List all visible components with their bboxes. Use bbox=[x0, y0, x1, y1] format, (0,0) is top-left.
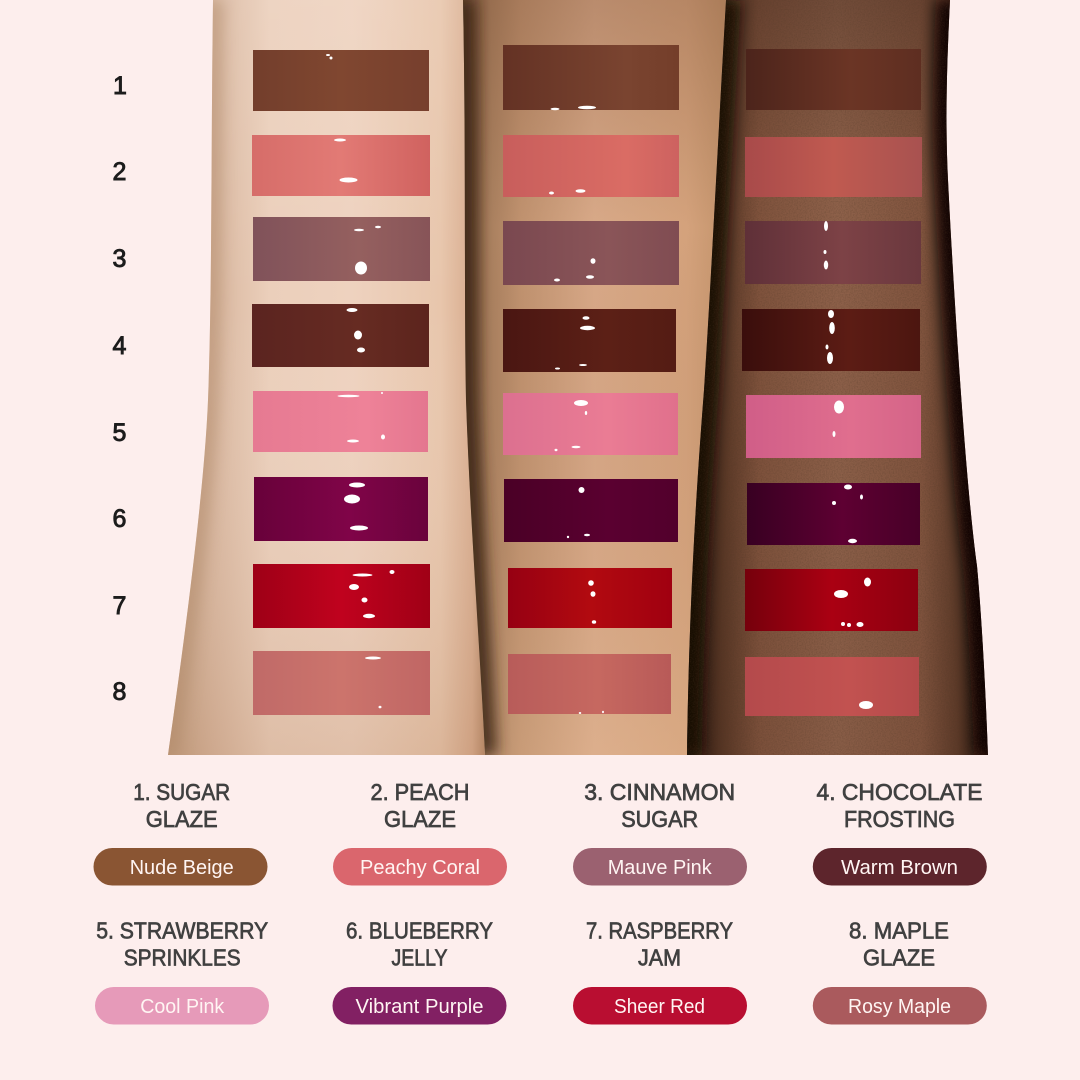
pill: Vibrant Purple bbox=[332, 987, 506, 1024]
swatch 1 deep bbox=[746, 49, 921, 110]
swatch 1 light bbox=[253, 50, 429, 111]
heading: 1. Sugar Glaze: 1. SUGAR bbox=[133, 779, 230, 805]
heading: 7. Raspberry Jam: JAM bbox=[638, 944, 681, 970]
swatch 8 medium bbox=[508, 654, 671, 714]
swatch 6 light bbox=[254, 477, 428, 541]
heading: 3. Cinnamon Sugar: SUGAR bbox=[621, 806, 698, 832]
heading: 5. Strawberry Sprinkles: 5. STRAWBERRY bbox=[96, 917, 268, 943]
pill: Warm Brown: Warm Brown bbox=[841, 857, 958, 879]
row numbers: 7 bbox=[113, 592, 126, 620]
heading: 3. Cinnamon Sugar bbox=[584, 779, 735, 832]
row numbers: 2 bbox=[113, 158, 126, 186]
swatches on light arm bbox=[252, 50, 430, 715]
pill: Peachy Coral bbox=[333, 848, 507, 886]
swatch 5 medium bbox=[503, 393, 678, 455]
swatch 7 deep bbox=[745, 569, 918, 631]
pill: Warm Brown bbox=[813, 848, 987, 886]
heading: 6. Blueberry Jelly: JELLY bbox=[392, 944, 448, 970]
swatch 3 medium bbox=[503, 221, 679, 285]
pill: Cool Pink bbox=[95, 987, 269, 1024]
pill: Mauve Pink bbox=[573, 848, 747, 886]
pill: Sheer Red bbox=[573, 987, 747, 1024]
arm: deep skin tone bbox=[687, 0, 988, 755]
heading: 5. Strawberry Sprinkles: SPRINKLES bbox=[124, 944, 241, 970]
swatch 6 medium bbox=[504, 479, 678, 542]
swatch 6 deep bbox=[747, 483, 920, 545]
heading: 4. Chocolate Frosting: 4. CHOCOLATE bbox=[816, 779, 982, 805]
swatch 2 light bbox=[252, 135, 430, 196]
row numbers: 3 bbox=[113, 245, 126, 273]
heading: 1. Sugar Glaze: GLAZE bbox=[146, 806, 218, 832]
row numbers bbox=[113, 72, 127, 706]
swatch 5 light bbox=[253, 391, 428, 452]
arm: medium skin tone bbox=[463, 0, 726, 755]
pill: Nude Beige bbox=[94, 848, 268, 886]
heading: 8. Maple Glaze: GLAZE bbox=[863, 944, 935, 970]
heading: 8. Maple Glaze bbox=[849, 917, 949, 970]
pill: Mauve Pink: Mauve Pink bbox=[608, 857, 713, 879]
heading: 5. Strawberry Sprinkles bbox=[96, 917, 268, 970]
row numbers: 8 bbox=[113, 678, 126, 706]
swatch 4 deep bbox=[742, 309, 920, 371]
pill: Sheer Red: Sheer Red bbox=[614, 996, 705, 1018]
swatch 4 medium bbox=[503, 309, 676, 372]
swatch 5 deep bbox=[746, 395, 921, 458]
heading: 2. Peach Glaze: GLAZE bbox=[384, 806, 456, 832]
pill: Vibrant Purple: Vibrant Purple bbox=[356, 996, 484, 1018]
swatch 1 medium bbox=[503, 45, 679, 110]
shade legend bbox=[94, 779, 987, 1024]
heading: 1. Sugar Glaze bbox=[133, 779, 230, 832]
heading: 6. Blueberry Jelly: 6. BLUEBERRY bbox=[346, 917, 493, 943]
heading: 3. Cinnamon Sugar: 3. CINNAMON bbox=[584, 779, 735, 805]
heading: 4. Chocolate Frosting bbox=[816, 779, 982, 832]
row numbers: 5 bbox=[113, 419, 126, 447]
heading: 7. Raspberry Jam: 7. RASPBERRY bbox=[586, 917, 733, 943]
swatch 7 light bbox=[253, 564, 430, 628]
heading: 2. Peach Glaze: 2. PEACH bbox=[370, 779, 470, 805]
pill: Rosy Maple bbox=[813, 987, 987, 1024]
pill: Cool Pink: Cool Pink bbox=[140, 996, 225, 1018]
swatch 2 medium bbox=[503, 135, 679, 197]
heading: 6. Blueberry Jelly bbox=[346, 917, 493, 970]
swatch 8 deep bbox=[745, 657, 919, 716]
row numbers: 6 bbox=[113, 505, 126, 533]
swatch 7 medium bbox=[508, 568, 672, 628]
heading: 4. Chocolate Frosting: FROSTING bbox=[844, 806, 955, 832]
heading: 8. Maple Glaze: 8. MAPLE bbox=[849, 917, 949, 943]
swatches on medium arm bbox=[503, 45, 679, 714]
swatch 3 light bbox=[253, 217, 430, 281]
pill: Peachy Coral: Peachy Coral bbox=[360, 857, 480, 879]
heading: 7. Raspberry Jam bbox=[586, 917, 733, 970]
arm: light skin tone bbox=[168, 0, 485, 755]
row numbers: 1 bbox=[113, 72, 127, 100]
swatch 8 light bbox=[253, 651, 430, 715]
row numbers: 4 bbox=[113, 332, 127, 360]
heading: 2. Peach Glaze bbox=[370, 779, 470, 832]
swatch 2 deep bbox=[745, 137, 922, 197]
pill: Nude Beige: Nude Beige bbox=[130, 857, 234, 879]
swatch 4 light bbox=[252, 304, 429, 367]
swatches on deep arm bbox=[742, 49, 922, 716]
swatch 3 deep bbox=[745, 221, 921, 284]
pill: Rosy Maple: Rosy Maple bbox=[848, 996, 951, 1018]
